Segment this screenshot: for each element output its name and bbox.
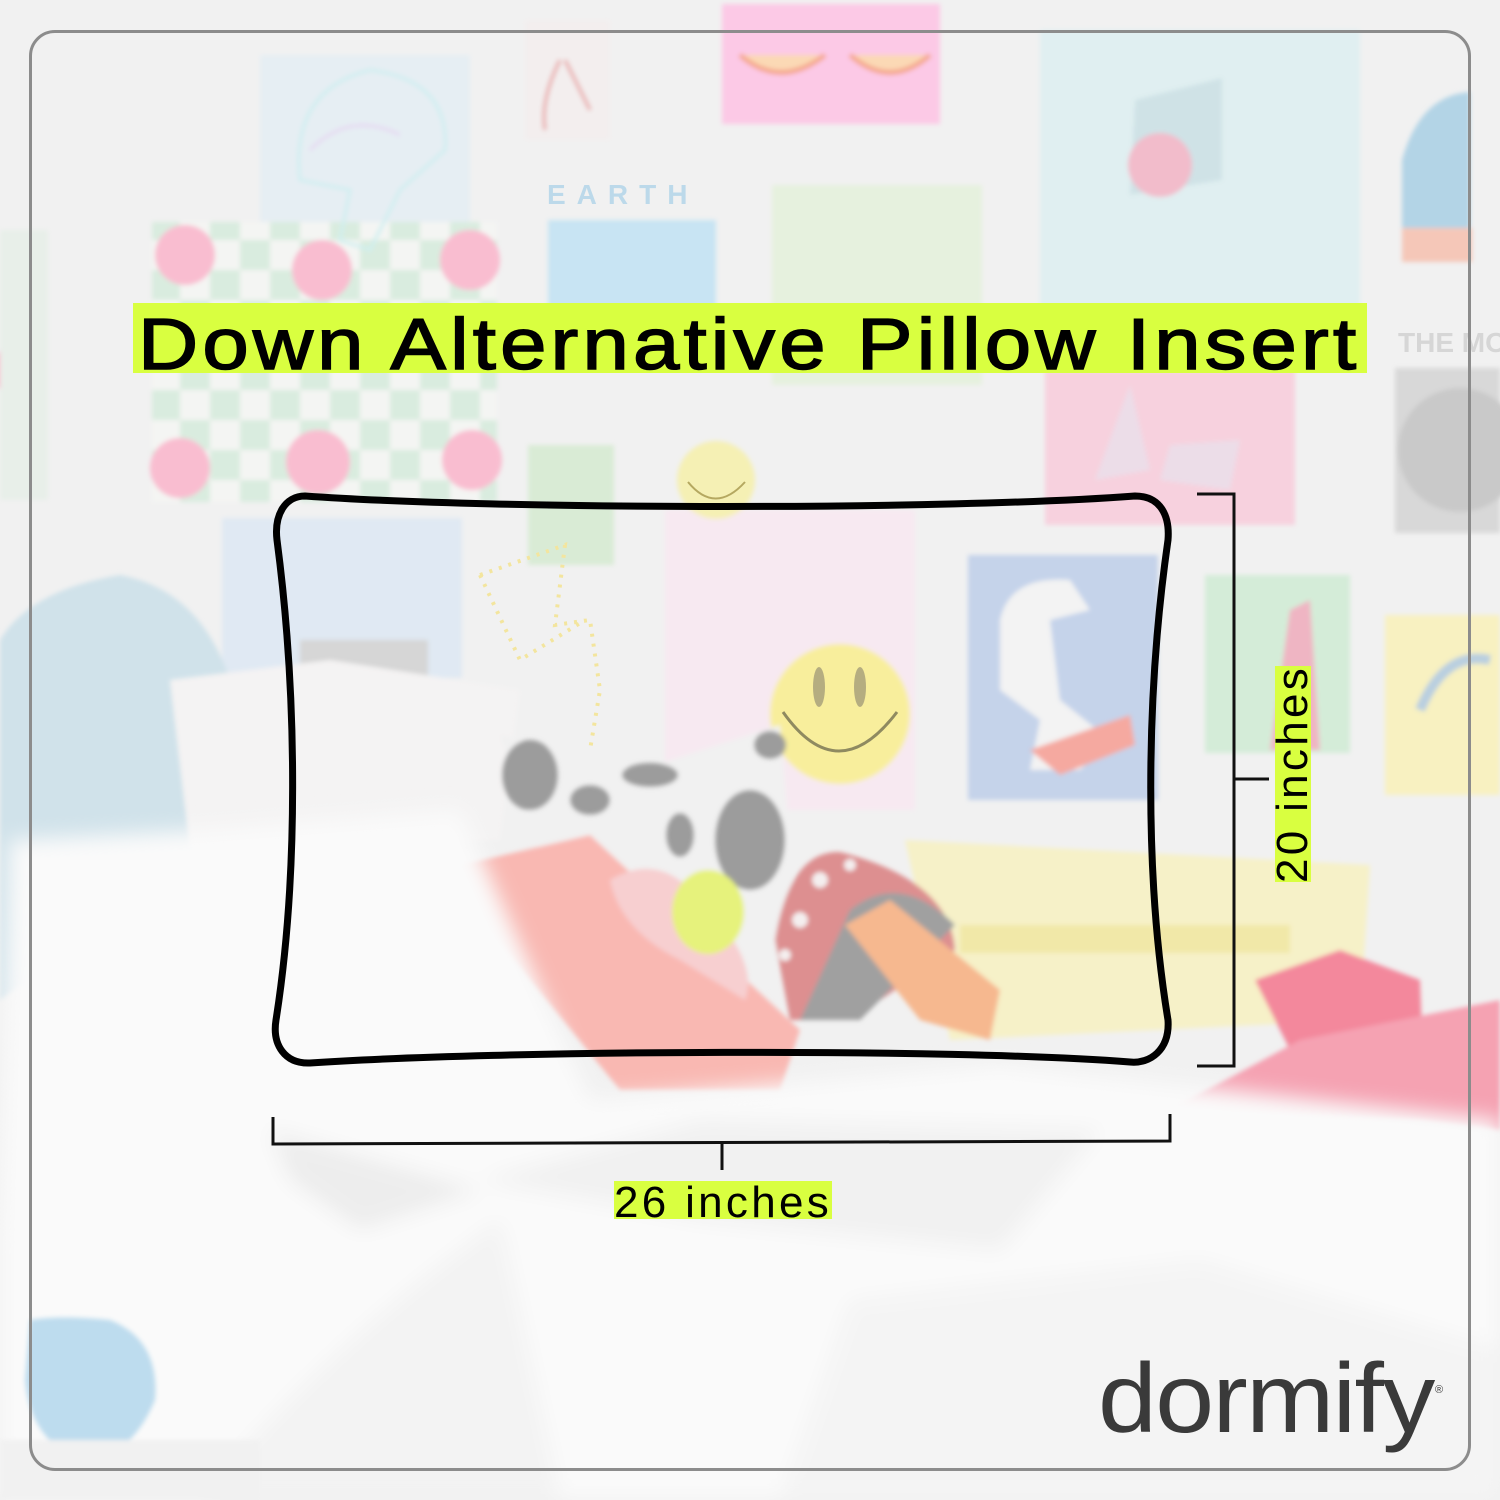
height label: 20 inches: 20 inches [1268,665,1317,883]
logo: dormify: dormify [1098,1343,1434,1453]
title: Down Alternative Pillow Insert [138,305,1360,385]
background text: Earth poster: EARTH [547,179,698,210]
neon mushroom sign [299,70,445,250]
width label: 26 inches: 26 inches [614,1178,832,1227]
pillow outline [275,496,1168,1063]
large smiley [813,667,866,707]
string lights lightning [480,545,600,750]
logo: dormify: ® [1435,1384,1443,1396]
height dimension bracket [1197,494,1269,1066]
small smiley [688,482,745,498]
width dimension bracket [273,1114,1170,1170]
